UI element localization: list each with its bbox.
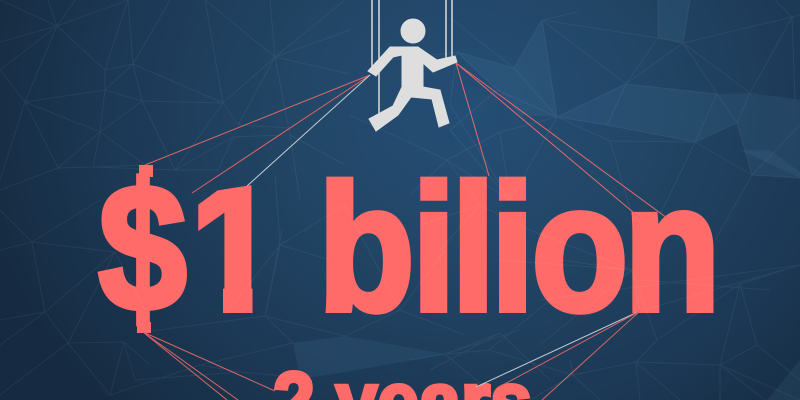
strings: heading to subheading (143, 311, 640, 400)
strings: right hand to heading (456, 63, 667, 218)
dollar sign bars (137, 165, 153, 333)
icon: running puppet figure (368, 19, 457, 131)
strings: left hand to heading (145, 75, 370, 193)
lighter low-poly facets (293, 0, 800, 400)
heading: $1 bilion: $1 bilion (99, 148, 721, 348)
puppet strings (372, 0, 452, 120)
